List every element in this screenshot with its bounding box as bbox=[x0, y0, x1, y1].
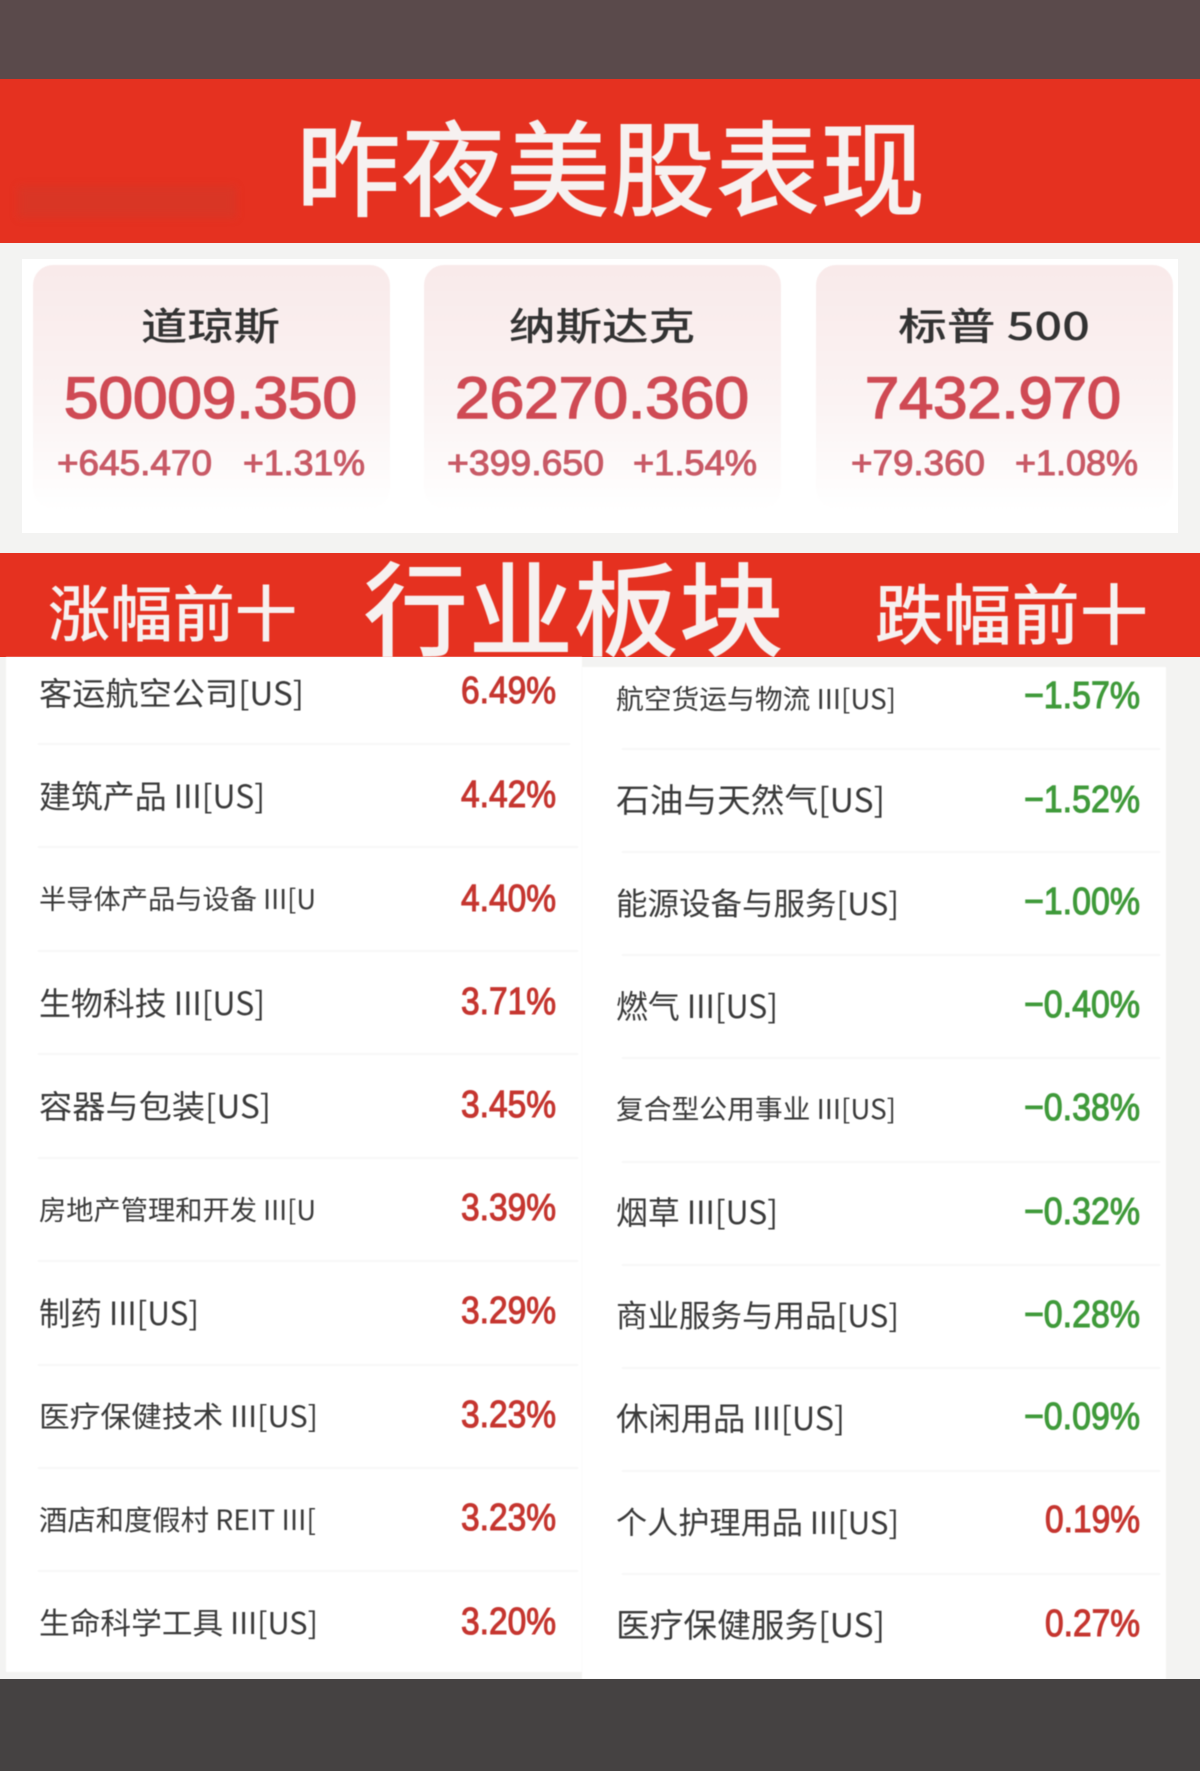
top dark bar bbox=[0, 0, 1200, 79]
row: 医疗保健服务 bbox=[616, 1599, 1140, 1647]
card: Nasdaq: 纳斯达克 bbox=[509, 296, 695, 351]
row: 酒店和度假村: 3.23% bbox=[461, 1497, 556, 1539]
card: Dow Jones: +1.31% bbox=[243, 444, 365, 483]
row: 半导体产品与设备 bbox=[39, 878, 556, 920]
card: Dow Jones bbox=[33, 265, 390, 509]
row: 酒店和度假村: 酒店和度假村 REIT III[ bbox=[39, 1499, 316, 1539]
row: 容器与包装 bbox=[39, 1082, 556, 1128]
heading: top gainers: 涨幅前十 bbox=[48, 565, 297, 654]
card: Nasdaq: 26270.360 bbox=[455, 366, 749, 431]
row: 烟草 bbox=[616, 1188, 1140, 1234]
row: 能源设备与服务 bbox=[616, 879, 1140, 924]
sector banner bbox=[0, 529, 1200, 678]
row: 个人护理用品: 个人护理用品 III[US] bbox=[616, 1498, 899, 1543]
row: 制药: 制药 III[US] bbox=[39, 1289, 199, 1335]
heading: top losers: 跌幅前十 bbox=[875, 563, 1148, 659]
row: 个人护理用品: 0.19% bbox=[1045, 1499, 1140, 1541]
row: 生物科技 bbox=[39, 979, 556, 1025]
row: 客运航空公司: 客运航空公司[US] bbox=[39, 669, 304, 715]
row: 生物科技: 生物科技 III[US] bbox=[39, 979, 265, 1025]
panel: index cards bbox=[22, 259, 1178, 533]
row: 客运航空公司 bbox=[39, 669, 556, 715]
card: Nasdaq bbox=[424, 265, 781, 509]
row: 生命科学工具 bbox=[39, 1599, 556, 1643]
row: 容器与包装: 容器与包装[US] bbox=[39, 1082, 271, 1128]
row: 医疗保健技术: 3.23% bbox=[461, 1394, 556, 1436]
row: 容器与包装: 3.45% bbox=[461, 1084, 556, 1126]
card: Dow Jones: 道琼斯 bbox=[141, 296, 280, 351]
title banner bbox=[0, 79, 1200, 243]
row: 休闲用品 bbox=[616, 1394, 1140, 1440]
row: 燃气: −0.40% bbox=[1024, 984, 1140, 1026]
heading: sectors: 行业板块 bbox=[363, 529, 784, 678]
title: 昨夜美股表现 bbox=[296, 87, 925, 238]
card: Nasdaq: +399.650 bbox=[447, 444, 604, 483]
row: 半导体产品与设备: 4.40% bbox=[461, 878, 556, 920]
card: S&P 500: +79.360 bbox=[851, 444, 985, 483]
row: 石油与天然气: −1.52% bbox=[1024, 779, 1140, 821]
row: 医疗保健技术: 医疗保健技术 III[US] bbox=[39, 1394, 318, 1436]
row: 生物科技: 3.71% bbox=[461, 981, 556, 1023]
row: 复合型公用事业 bbox=[616, 1087, 1140, 1129]
row: 医疗保健服务: 医疗保健服务[US] bbox=[616, 1599, 885, 1647]
row: 商业服务与用品: 商业服务与用品[US] bbox=[616, 1291, 899, 1336]
row: 客运航空公司: 6.49% bbox=[461, 670, 556, 712]
row: 房地产管理和开发: 房地产管理和开发 III[U bbox=[39, 1189, 316, 1228]
card: S&P 500: +1.08% bbox=[1015, 444, 1138, 483]
row: 房地产管理和开发 bbox=[39, 1187, 556, 1229]
card: S&P 500: 7432.970 bbox=[865, 366, 1121, 431]
blurred watermark bbox=[18, 186, 236, 218]
card: S&P 500 bbox=[816, 265, 1173, 509]
row: 建筑产品: 建筑产品 III[US] bbox=[39, 772, 265, 818]
bottom dark bar bbox=[0, 1679, 1200, 1771]
row: 建筑产品: 4.42% bbox=[461, 774, 556, 816]
card: Nasdaq: +1.54% bbox=[633, 444, 757, 483]
row: 制药: 3.29% bbox=[461, 1290, 556, 1332]
row: 生命科学工具: 3.20% bbox=[461, 1601, 556, 1643]
row: 复合型公用事业: 复合型公用事业 III[US] bbox=[616, 1088, 896, 1127]
row: 石油与天然气: 石油与天然气[US] bbox=[616, 774, 885, 822]
row: 能源设备与服务: 能源设备与服务[US] bbox=[616, 879, 899, 924]
row: 烟草: −0.32% bbox=[1024, 1191, 1140, 1233]
row: 燃气 bbox=[616, 982, 1140, 1028]
row: 建筑产品 bbox=[39, 772, 556, 818]
row: 商业服务与用品: −0.28% bbox=[1024, 1294, 1140, 1336]
card: Dow Jones: +645.470 bbox=[57, 444, 212, 483]
row: 医疗保健技术 bbox=[39, 1394, 556, 1436]
row: 房地产管理和开发: 3.39% bbox=[461, 1187, 556, 1229]
row: 制药 bbox=[39, 1289, 556, 1335]
row: 酒店和度假村 bbox=[39, 1497, 556, 1539]
row: 生命科学工具: 生命科学工具 III[US] bbox=[39, 1599, 318, 1643]
row: 燃气: 燃气 III[US] bbox=[616, 982, 778, 1028]
row: 半导体产品与设备: 半导体产品与设备 III[U bbox=[39, 878, 316, 917]
row: 石油与天然气 bbox=[616, 774, 1140, 822]
panel: top gainers list bbox=[6, 657, 582, 1672]
panel: top losers list bbox=[582, 667, 1166, 1679]
row: 医疗保健服务: 0.27% bbox=[1045, 1603, 1140, 1645]
row: 航空货运与物流 bbox=[616, 675, 1140, 717]
card: S&P 500: 标普 500 bbox=[898, 296, 1090, 351]
row: 航空货运与物流: −1.57% bbox=[1024, 675, 1140, 717]
row: 烟草: 烟草 III[US] bbox=[616, 1188, 778, 1234]
row: 复合型公用事业: −0.38% bbox=[1024, 1087, 1140, 1129]
row: 商业服务与用品 bbox=[616, 1291, 1140, 1336]
row: 航空货运与物流: 航空货运与物流 III[US] bbox=[616, 678, 896, 717]
row: 个人护理用品 bbox=[616, 1498, 1140, 1543]
row: 休闲用品: 休闲用品 III[US] bbox=[616, 1394, 845, 1440]
card: Dow Jones: 50009.350 bbox=[64, 366, 357, 431]
row: 能源设备与服务: −1.00% bbox=[1024, 881, 1140, 923]
row: 休闲用品: −0.09% bbox=[1024, 1396, 1140, 1438]
